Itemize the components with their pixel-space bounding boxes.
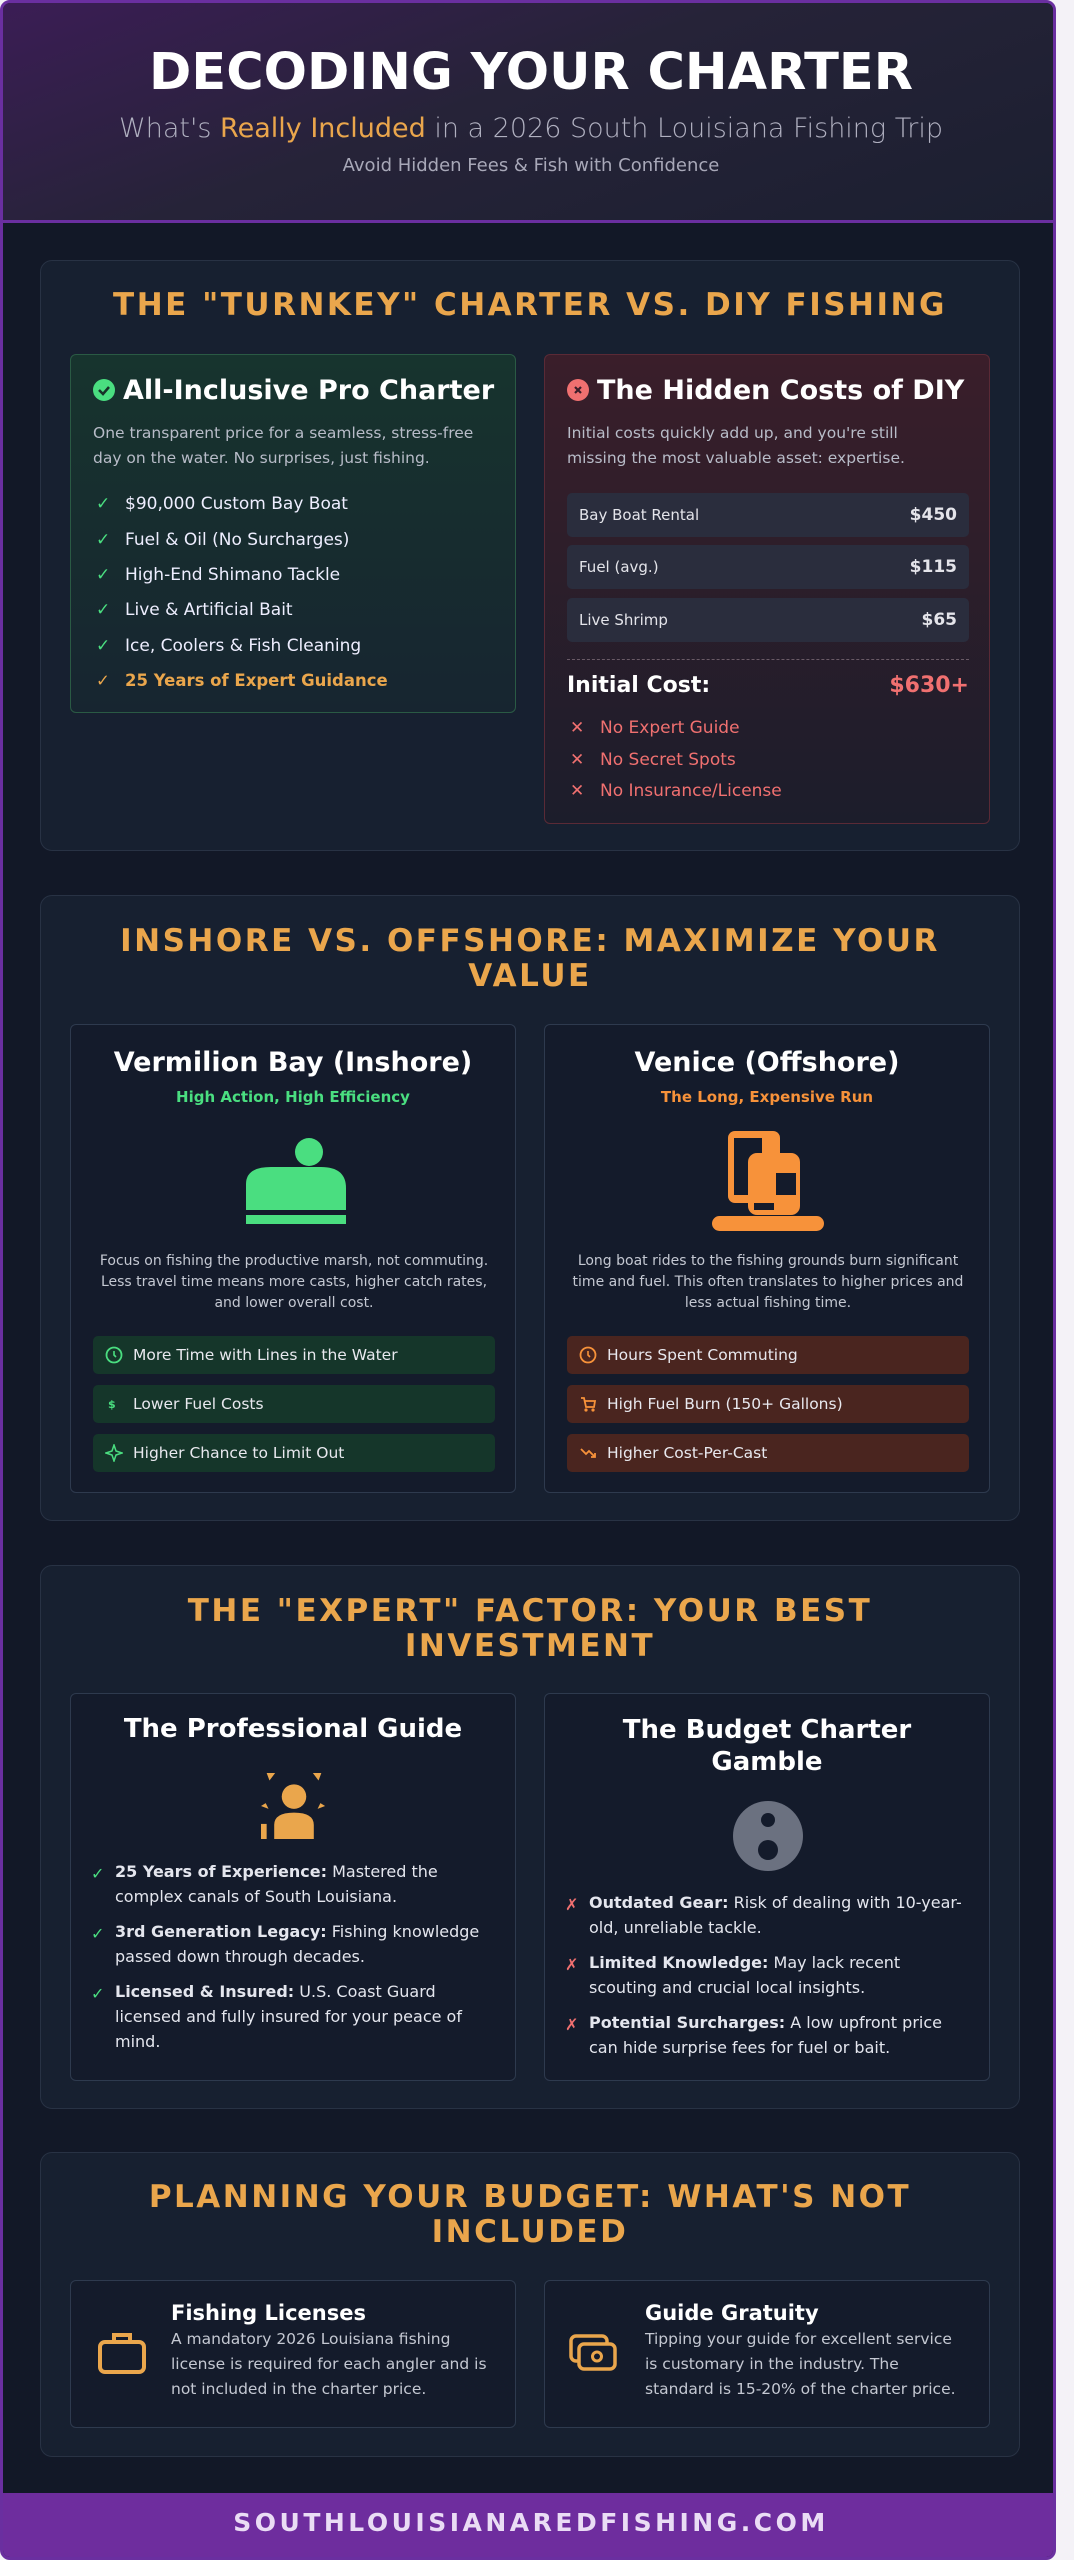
cost rows	[567, 493, 969, 801]
card: pro charter	[70, 354, 516, 713]
list: Ice, Coolers & Fish Cleaning	[125, 636, 361, 656]
icon: question coin	[733, 1801, 803, 1871]
card: budget charter	[544, 1693, 990, 2081]
cost rows: No Secret Spots	[600, 750, 736, 770]
list: 3rd Generation Legacy: Fishing knowledge passed down through decades.	[115, 1922, 479, 1966]
panel: budget not included	[40, 2152, 1020, 2457]
section title: INVESTMENT	[405, 1628, 655, 1664]
heading: All-Inclusive Pro Charter	[123, 375, 494, 406]
benefit bars: $	[108, 1398, 116, 1411]
card: fishing licenses	[70, 2280, 516, 2428]
cost rows: ✕	[570, 750, 584, 770]
list: ✓	[96, 671, 110, 690]
heading: The Hidden Costs of DIY	[597, 375, 964, 406]
subheading: High Action, High Efficiency	[176, 1088, 410, 1106]
card: hidden costs DIY	[544, 354, 990, 824]
cost rows: Live Shrimp	[579, 611, 668, 629]
drawback bars: High Fuel Burn (150+ Gallons)	[607, 1395, 843, 1413]
list: ✓	[91, 1924, 104, 1943]
heading: The Professional Guide	[124, 1714, 462, 1744]
section title: THE "EXPERT" FACTOR: YOUR BEST	[188, 1593, 872, 1629]
heading: Vermilion Bay (Inshore)	[114, 1047, 472, 1078]
drawback bars: Hours Spent Commuting	[607, 1346, 798, 1364]
list: Limited Knowledge: May lack recent scouting and crucial local insights.	[589, 1953, 900, 1997]
text	[644, 2301, 956, 2398]
section title	[120, 923, 940, 994]
list: ✗	[565, 1895, 578, 1914]
card: professional guide	[70, 1693, 516, 2081]
benefit bars: Higher Chance to Limit Out	[133, 1444, 344, 1462]
list: 25 Years of Experience: Mastered the complex canals of South Louisiana.	[115, 1862, 438, 1906]
list: ✓	[96, 565, 110, 585]
benefit bars: Lower Fuel Costs	[133, 1395, 264, 1413]
cost rows: $450	[910, 505, 957, 525]
text: Fishing Licenses	[171, 2301, 366, 2325]
drawback bars: Higher Cost-Per-Cast	[607, 1444, 767, 1462]
section title: INSHORE VS. OFFSHORE: MAXIMIZE YOUR	[120, 923, 940, 959]
card: guide gratuity	[544, 2280, 990, 2428]
list: $90,000 Custom Bay Boat	[125, 494, 348, 514]
header	[3, 3, 1059, 223]
section title: PLANNING YOUR BUDGET: WHAT'S NOT	[149, 2179, 911, 2215]
text: Guide Gratuity	[645, 2301, 819, 2325]
cost rows: No Insurance/License	[600, 781, 782, 801]
text: A mandatory 2026 Louisiana fishing license is required for each angler and is not included in the charter price.	[171, 2330, 487, 2398]
cost rows: $630+	[889, 673, 969, 698]
list: ✓	[91, 1984, 104, 2003]
icon: money	[569, 2334, 617, 2371]
cost rows: ✕	[570, 718, 584, 738]
list	[91, 1862, 479, 2051]
cost rows: Bay Boat Rental	[579, 506, 699, 524]
description: Focus on fishing the productive marsh, not commuting. Less travel time means more casts, higher catch rates, and lower overall cost.	[100, 1253, 488, 1311]
text: Tipping your guide for excellent service is customary in the industry. The standard is 15-20% of the charter price.	[645, 2330, 956, 2398]
icon: guide	[261, 1773, 325, 1839]
description: One transparent price for a seamless, stress-free day on the water. No surprises, just fishing.	[93, 424, 473, 467]
list: ✓	[96, 600, 110, 620]
cost rows: ✕	[570, 781, 584, 801]
cost rows: $115	[910, 557, 957, 577]
description: Initial costs quickly add up, and you're still missing the most valuable asset: expertise.	[567, 424, 905, 467]
list: ✓	[91, 1864, 104, 1883]
list: Live & Artificial Bait	[125, 600, 293, 620]
list: High-End Shimano Tackle	[125, 565, 340, 585]
section title: INCLUDED	[432, 2214, 628, 2250]
list: Licensed & Insured: U.S. Coast Guard licensed and fully insured for your peace of mind.	[115, 1982, 462, 2051]
initial cost: Initial Cost:	[567, 673, 710, 698]
footer	[3, 2493, 1059, 2560]
section title	[149, 2179, 911, 2250]
list: Outdated Gear: Risk of dealing with 10-year-old, unreliable tackle.	[589, 1893, 962, 1937]
icon: briefcase	[98, 2333, 146, 2374]
heading: Venice (Offshore)	[635, 1047, 899, 1078]
list: ✗	[565, 1955, 578, 1974]
drawback bars	[567, 1336, 969, 1472]
footer: SOUTHLOUISIANAREDFISHING.COM	[233, 2508, 829, 2537]
list: Fuel & Oil (No Surcharges)	[125, 530, 349, 550]
list	[565, 1893, 962, 2057]
section title	[188, 1593, 872, 1664]
section title: VALUE	[468, 958, 592, 994]
icon: boat	[246, 1138, 346, 1224]
list: ✓	[96, 494, 110, 514]
cost rows: $65	[922, 610, 957, 630]
benefit bars: More Time with Lines in the Water	[133, 1346, 398, 1364]
card: inshore	[70, 1024, 516, 1493]
list: 25 Years of Expert Guidance	[125, 671, 388, 690]
tagline: Avoid Hidden Fees & Fish with Confidence	[343, 155, 719, 176]
section title: THE "TURNKEY" CHARTER VS. DIY FISHING	[113, 287, 947, 323]
cost rows: Fuel (avg.)	[579, 558, 659, 576]
panel: expert factor	[40, 1565, 1020, 2109]
panel: turnkey vs DIY	[40, 260, 1020, 851]
heading	[622, 1715, 912, 1777]
list: ✗	[565, 2015, 578, 2034]
heading: The Budget Charter	[623, 1715, 911, 1745]
subtitle: What's Really Included in a 2026 South Louisiana Fishing Trip	[119, 113, 943, 144]
subheading: The Long, Expensive Run	[661, 1088, 873, 1106]
list: Potential Surcharges: A low upfront price can hide surprise fees for fuel or bait.	[589, 2013, 942, 2057]
benefit bars	[93, 1336, 495, 1472]
description: Long boat rides to the fishing grounds burn significant time and fuel. This often translates to higher prices and less actual fishing time.	[573, 1253, 963, 1311]
icon: fuel pump	[712, 1131, 824, 1231]
cost rows: No Expert Guide	[600, 718, 740, 738]
list: ✓	[96, 530, 110, 550]
panel: inshore vs offshore	[40, 895, 1020, 1521]
title: DECODING YOUR CHARTER	[149, 43, 913, 102]
heading: Gamble	[711, 1747, 823, 1777]
list	[96, 494, 388, 690]
list: ✓	[96, 636, 110, 656]
card: offshore	[544, 1024, 990, 1493]
